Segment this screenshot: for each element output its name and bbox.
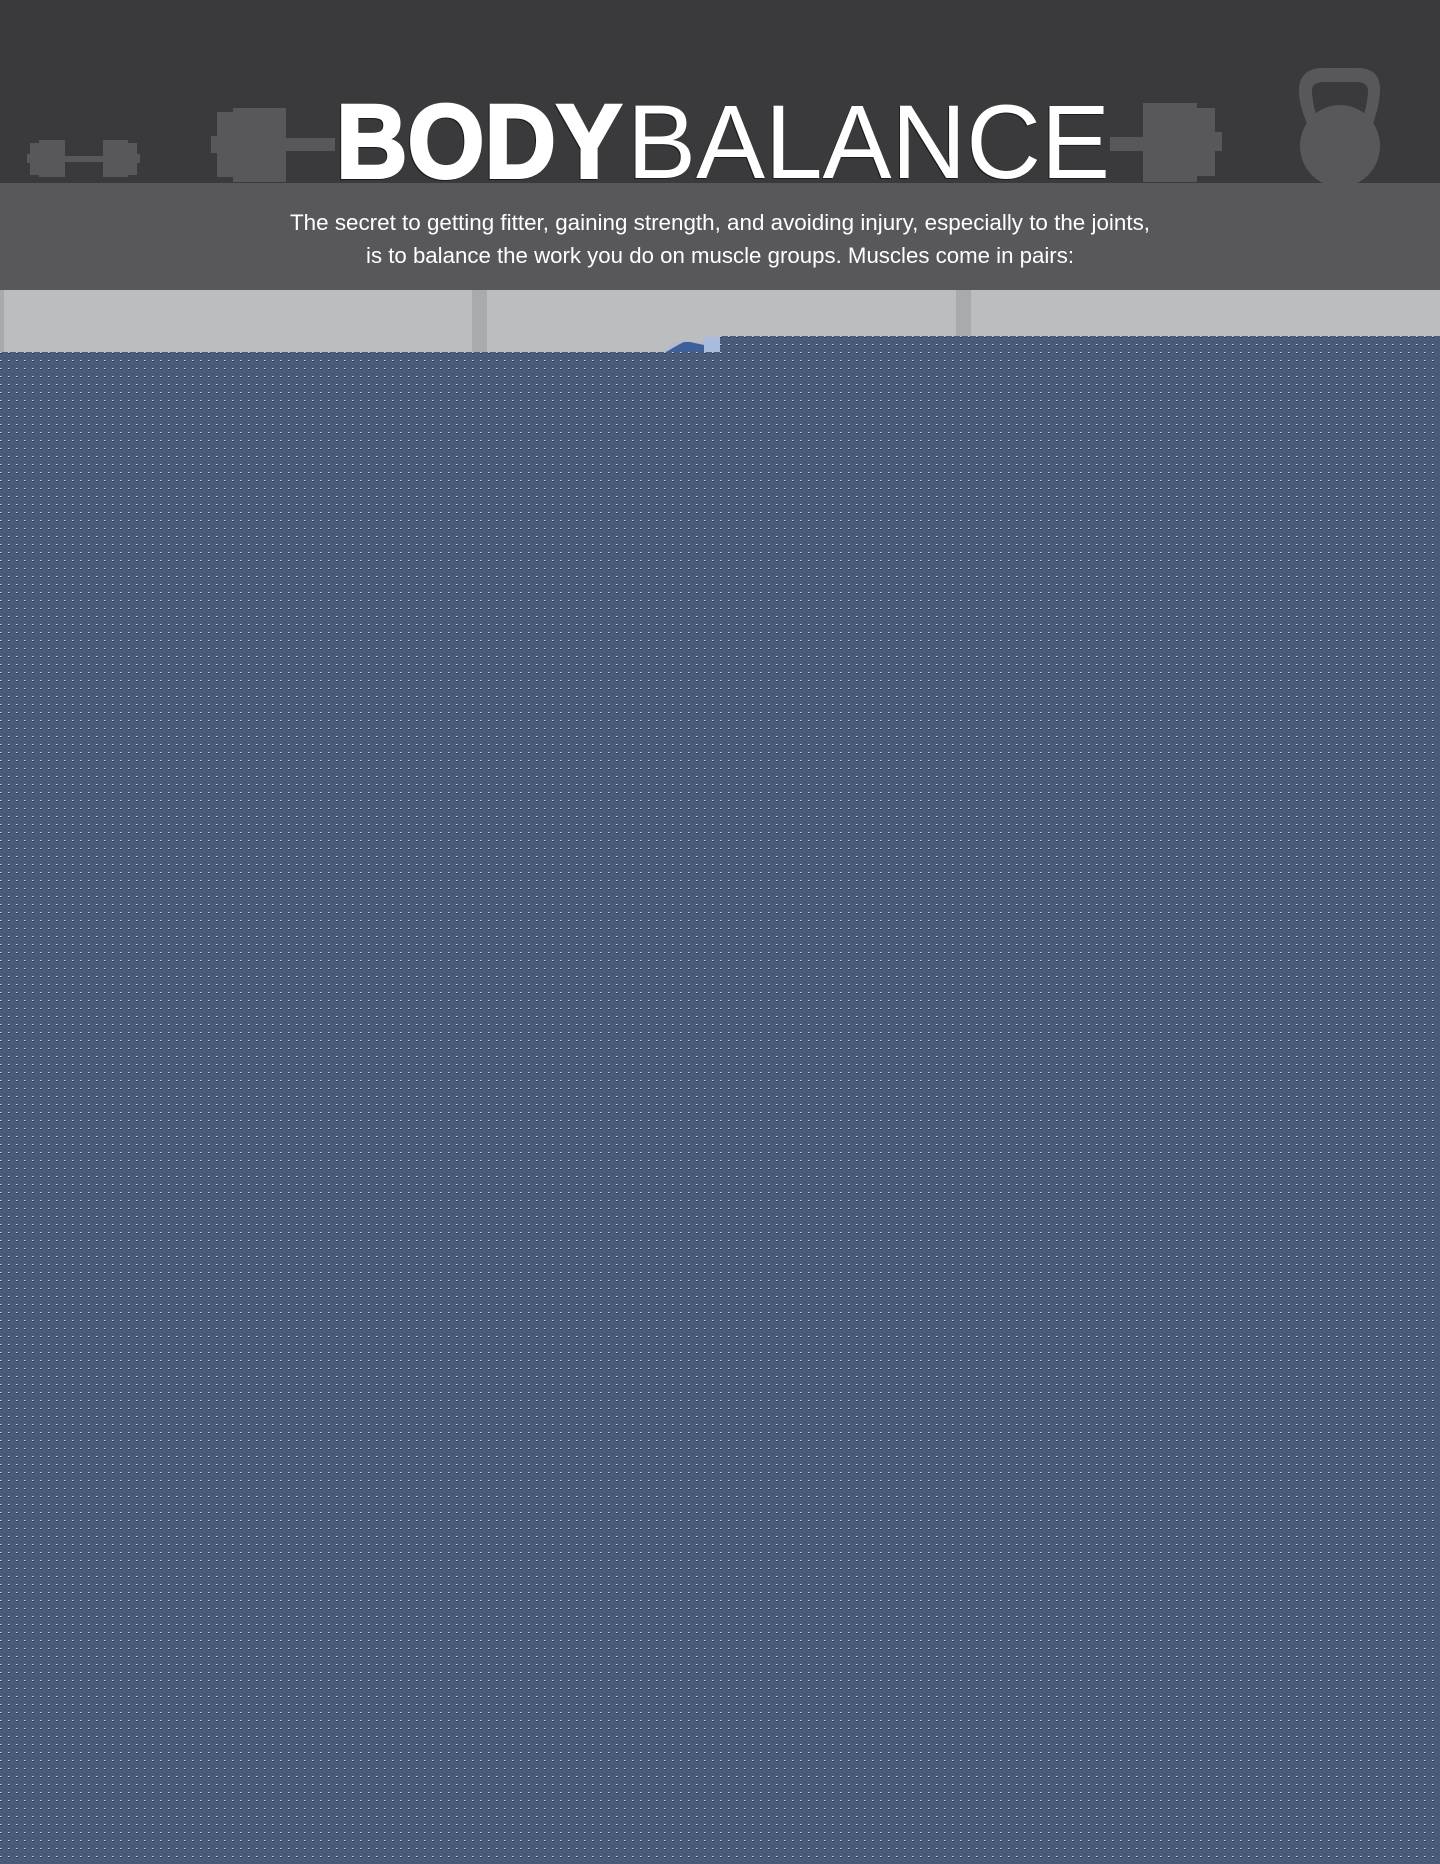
intro text <box>290 210 1150 268</box>
intro text: The secret to getting fitter, gaining strength, and avoiding injury, especially to the joints, <box>290 210 1150 235</box>
title: BODY <box>336 84 622 200</box>
intro text: is to balance the work you do on muscle groups. Muscles come in pairs: <box>366 243 1074 268</box>
gym wall panel <box>0 290 1440 360</box>
title: BALANCE <box>627 84 1110 201</box>
title <box>336 84 1110 201</box>
header background <box>0 0 1440 183</box>
icon: large barbell right end <box>1110 103 1222 182</box>
icon: small dumbbell <box>27 140 140 177</box>
subtitle band <box>0 183 1440 290</box>
figure fragment peeking above blue panel <box>660 337 720 352</box>
icon: kettlebell <box>1299 68 1380 187</box>
icon: large barbell left end <box>211 108 335 182</box>
